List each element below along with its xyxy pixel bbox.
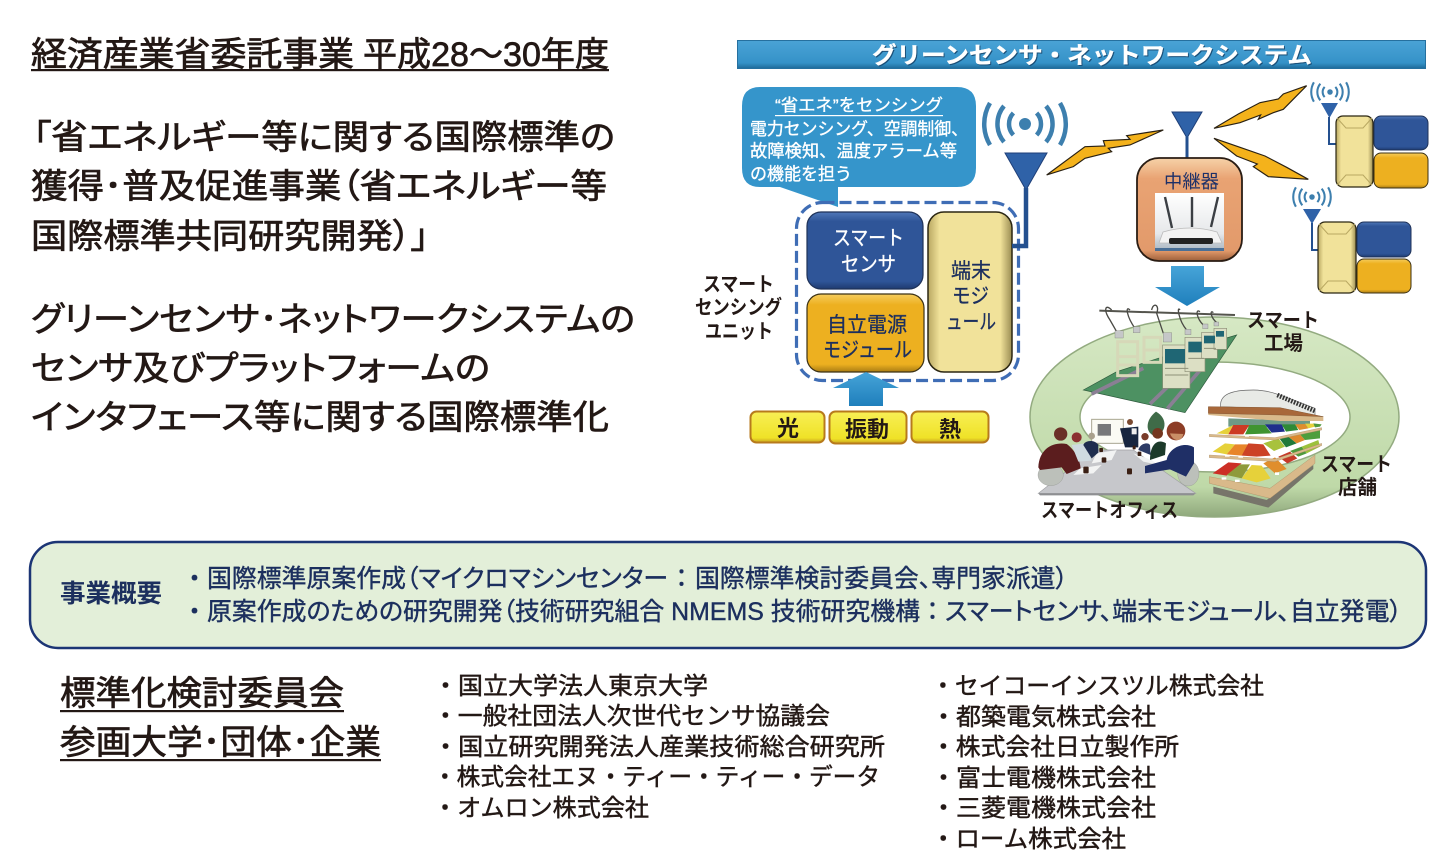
illustration: smart store [1208, 390, 1323, 508]
label: smart factory: 工場 [1264, 332, 1303, 355]
list: participants right: ・富士電機株式会社 [931, 765, 1156, 792]
smart sensor box: スマート [833, 227, 904, 250]
text block: project description: センサ及びプラットフォームの [31, 350, 490, 388]
label: smart sensing unit: スマート [703, 274, 774, 296]
label: smart sensing unit [695, 274, 782, 343]
icon: lightning upper right [1214, 86, 1307, 128]
callout: energy-saving sensing: の機能を担う [750, 164, 852, 184]
list: participants left: ・一般社団法人次世代センサ協議会 [433, 703, 830, 730]
remote sensor unit: upper [1311, 82, 1428, 188]
terminal module box: ュール [946, 311, 996, 334]
text block: project description: グリーンセンサ･ネットワークシステムの [31, 301, 635, 339]
label: smart store: 店舗 [1338, 476, 1377, 499]
callout: energy-saving sensing: 故障検知、温度アラーム等 [750, 141, 957, 161]
icon: repeater antenna [1172, 112, 1202, 160]
list: participants right: ・三菱電機株式会社 [931, 795, 1156, 822]
smart sensor box: センサ [841, 253, 896, 276]
energy sources: light, vibration, heat [750, 412, 988, 444]
overview line 1: 国際標準検討委員会、専門家派遣） [695, 565, 1068, 593]
overview line 2 [182, 598, 1402, 626]
overview line 2: ・ [182, 598, 207, 626]
diagram heading bar [738, 40, 1426, 68]
text block: project name [31, 119, 615, 256]
overview line 1: ： [669, 565, 694, 593]
overview line 2: スマートセンサ、端末モジュール、自立発電） [945, 598, 1402, 626]
icon: lightning lower right [1214, 138, 1308, 179]
repeater with router [1137, 158, 1242, 261]
label: smart store: スマート [1321, 454, 1392, 476]
list: participants right: ・株式会社日立製作所 [931, 734, 1179, 761]
overview line 2: ： [920, 598, 945, 626]
list: participants left: ・オムロン株式会社 [433, 795, 649, 822]
icon: router [1155, 193, 1224, 251]
text block: project description [31, 301, 635, 437]
icon: sensor antenna [984, 103, 1066, 246]
list: participants left: ・国立大学法人東京大学 [433, 673, 708, 700]
arrow: repeater down to applications [1155, 266, 1220, 306]
overview heading: 事業概要 [60, 580, 162, 608]
list: participants right: ・セイコーインスツル株式会社 [931, 673, 1264, 700]
self-powered module box: 自立電源 [827, 314, 907, 337]
terminal module box: モジ [952, 285, 989, 308]
list: participants left: ・株式会社エヌ・ティー・ティー・データ [433, 764, 880, 791]
illustration: smart office [1038, 412, 1199, 495]
label: smart sensing unit: センシング [695, 295, 782, 319]
energy sources: light, vibration, heat: 光 [777, 416, 799, 441]
callout: energy-saving sensing [742, 87, 976, 207]
terminal module box: 端末 [951, 260, 991, 283]
panel: project overview [30, 542, 1426, 648]
label: smart factory [1247, 310, 1319, 355]
overview line 1: 国際標準原案作成（マイクロマシンセンター [207, 565, 668, 593]
title [31, 36, 609, 74]
list: participants right: ・都築電気株式会社 [931, 704, 1156, 731]
overview line 1: ・ [182, 565, 207, 593]
text block: project name: 「省エネルギー等に関する国際標準の [33, 119, 615, 157]
overview line 2: 原案作成のための研究開発（技術研究組合 NMEMS 技術研究機構 [207, 598, 920, 626]
text block: project description: インタフェース等に関する国際標準化 [31, 399, 609, 437]
self-powered module box: モジュール [823, 339, 912, 362]
smart sensor box [807, 212, 923, 289]
label: smart office: スマートオフィス [1041, 500, 1178, 522]
terminal module box [928, 212, 1012, 372]
energy sources: light, vibration, heat: 熱 [939, 417, 961, 442]
title: 経済産業省委託事業 [31, 36, 354, 74]
heading: standardization committee: 参画大学･団体･企業 [60, 724, 381, 762]
list: participants left: ・国立研究開発法人産業技術総合研究所 [433, 734, 885, 761]
text block: project name: 獲得･普及促進事業（省エネルギー等 [31, 168, 607, 206]
remote sensor unit: lower [1293, 187, 1411, 293]
illustration: smart factory [1083, 305, 1237, 413]
heading: standardization committee [60, 675, 381, 762]
self-powered module box [807, 294, 924, 372]
list: participants right: ・ローム株式会社 [931, 826, 1126, 853]
title: 平成28～30年度 [363, 36, 609, 74]
callout: energy-saving sensing: 電力センシング、空調制御、 [750, 119, 968, 139]
label: smart store [1321, 454, 1392, 499]
icon: lightning left [1047, 130, 1163, 175]
callout: energy-saving sensing: “省エネ”をセンシング [775, 96, 943, 115]
text block: project name: 国際標準共同研究開発）」 [31, 218, 429, 256]
diagram heading bar: グリーンセンサ・ネットワークシステム [872, 42, 1312, 68]
list: participants right [931, 673, 1264, 853]
label: smart sensing unit: ユニット [705, 321, 773, 343]
repeater with router: 中継器 [1164, 171, 1219, 192]
energy sources: light, vibration, heat: 振動 [845, 417, 889, 442]
arrow: energy input up [833, 372, 899, 406]
overview line 1 [182, 565, 1068, 593]
list: participants left [433, 673, 885, 822]
application ring [1030, 317, 1399, 517]
label: smart factory: スマート [1247, 310, 1319, 332]
panel: smart sensing unit [796, 202, 1018, 380]
heading: standardization committee: 標準化検討委員会 [60, 675, 344, 713]
